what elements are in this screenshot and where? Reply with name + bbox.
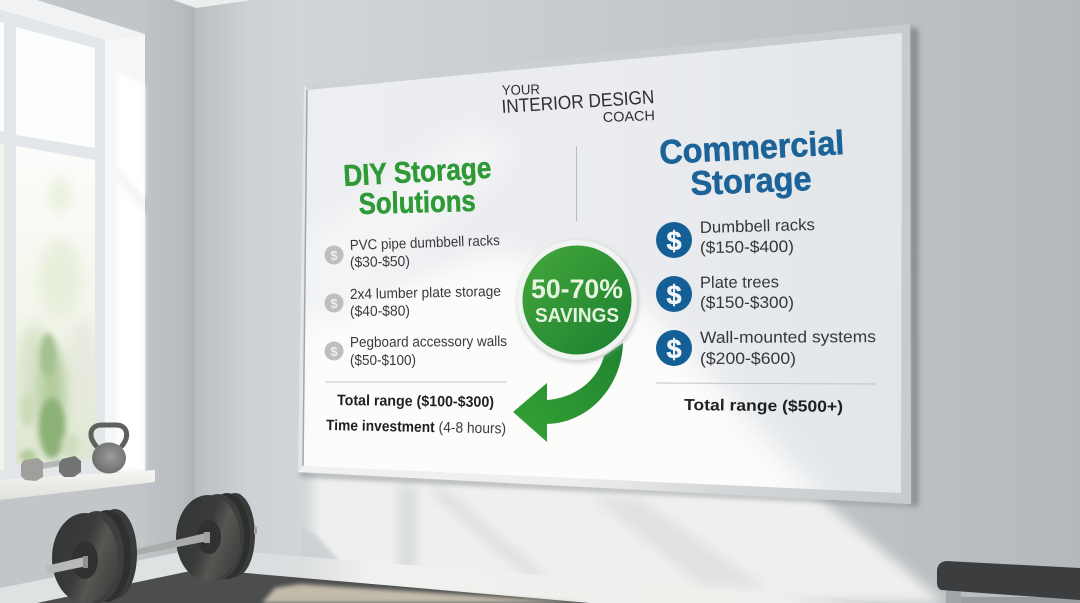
heading: commercial: Commercial bbox=[658, 124, 845, 172]
icon: grey dollar 2 bbox=[324, 294, 344, 312]
icon: grey dollar 1: $ bbox=[330, 248, 338, 263]
center divider bbox=[576, 146, 578, 221]
DIY totals: Time investment (4-8 hours) bbox=[326, 417, 506, 437]
left glass sliver lower bbox=[0, 144, 4, 470]
ceiling corner bbox=[173, 0, 252, 8]
commercial item text: Dumbbell racks bbox=[700, 216, 815, 237]
logo: INTERIOR DESIGN bbox=[501, 87, 655, 118]
DIY totals bbox=[326, 392, 506, 437]
DIY item text: ($50-$100) bbox=[350, 353, 416, 369]
savings badge: 50-70% bbox=[531, 274, 623, 304]
wall sunlight patches bbox=[308, 473, 944, 603]
bench bbox=[937, 561, 1080, 603]
arrow bbox=[513, 343, 623, 442]
window reveal bbox=[105, 34, 145, 472]
window frame bbox=[0, 10, 105, 482]
DIY item text: Pegboard accessory walls bbox=[350, 334, 507, 351]
upper window glass bbox=[16, 27, 95, 148]
icon: blue dollar 2 bbox=[656, 276, 692, 312]
icon: blue dollar 3 bbox=[656, 330, 692, 366]
commercial total: Total range ($500+) bbox=[684, 397, 843, 416]
heading: DIY: Solutions bbox=[358, 185, 476, 221]
barbell bbox=[46, 493, 257, 603]
logo: COACH bbox=[603, 107, 655, 125]
board shadow bbox=[300, 26, 918, 506]
commercial item text: ($200-$600) bbox=[700, 350, 796, 368]
commercial item text: ($150-$300) bbox=[700, 294, 794, 312]
back baseboard bbox=[195, 548, 890, 603]
window sill bbox=[0, 470, 155, 500]
heading: DIY: DIY Storage bbox=[343, 152, 492, 193]
DIY item text: PVC pipe dumbbell racks bbox=[350, 233, 500, 254]
heading: commercial bbox=[658, 124, 845, 203]
board frame bbox=[298, 24, 911, 504]
commercial item text: ($150-$400) bbox=[700, 238, 794, 257]
board panel bbox=[290, 33, 902, 510]
side wall with window bbox=[0, 0, 252, 588]
left plates bbox=[93, 509, 137, 599]
DIY item text: ($40-$80) bbox=[350, 303, 410, 320]
board inner edge bbox=[303, 90, 307, 466]
DIY list bbox=[324, 233, 507, 369]
icon: grey dollar 1 bbox=[324, 246, 344, 264]
commercial item text bbox=[700, 216, 876, 368]
heading: commercial: Storage bbox=[690, 160, 812, 203]
DIY item text: 2x4 lumber plate storage bbox=[350, 284, 501, 303]
floor bbox=[37, 569, 590, 603]
savings badge: SAVINGS bbox=[535, 305, 619, 327]
logo: YOUR bbox=[502, 81, 540, 98]
icon: grey dollar 2: $ bbox=[330, 296, 338, 311]
lower window glass bbox=[16, 146, 95, 464]
icon: blue dollar 3: $ bbox=[666, 334, 682, 364]
right plates bbox=[215, 493, 255, 577]
DIY divider bbox=[325, 381, 507, 383]
DIY item text: ($30-$50) bbox=[350, 254, 410, 271]
dumbbell bbox=[21, 456, 81, 481]
icon: grey dollar 3: $ bbox=[330, 344, 338, 359]
DIY totals: Total range ($100-$300) bbox=[337, 392, 494, 411]
logo bbox=[501, 81, 655, 125]
soffit bbox=[0, 0, 145, 40]
commercial item text: Plate trees bbox=[700, 273, 779, 292]
panel: commercial storage bbox=[656, 124, 876, 416]
left baseboard bbox=[0, 549, 200, 603]
panel: DIY storage bbox=[324, 152, 507, 437]
board light streaks bbox=[304, 148, 815, 489]
kettlebell bbox=[91, 425, 127, 474]
heading: DIY bbox=[343, 152, 492, 221]
icon: blue dollar 2: $ bbox=[666, 280, 682, 310]
savings badge bbox=[517, 240, 639, 363]
foliage bbox=[19, 177, 94, 462]
icon: blue dollar 1: $ bbox=[666, 226, 682, 256]
commercial item text: Wall-mounted systems bbox=[700, 328, 876, 347]
icon: blue dollar 1 bbox=[656, 222, 692, 258]
icon: grey dollar 3 bbox=[324, 342, 344, 360]
DIY item text bbox=[350, 233, 507, 369]
bar bbox=[137, 533, 208, 555]
left glass sliver upper bbox=[0, 22, 4, 132]
commercial divider bbox=[656, 383, 876, 384]
